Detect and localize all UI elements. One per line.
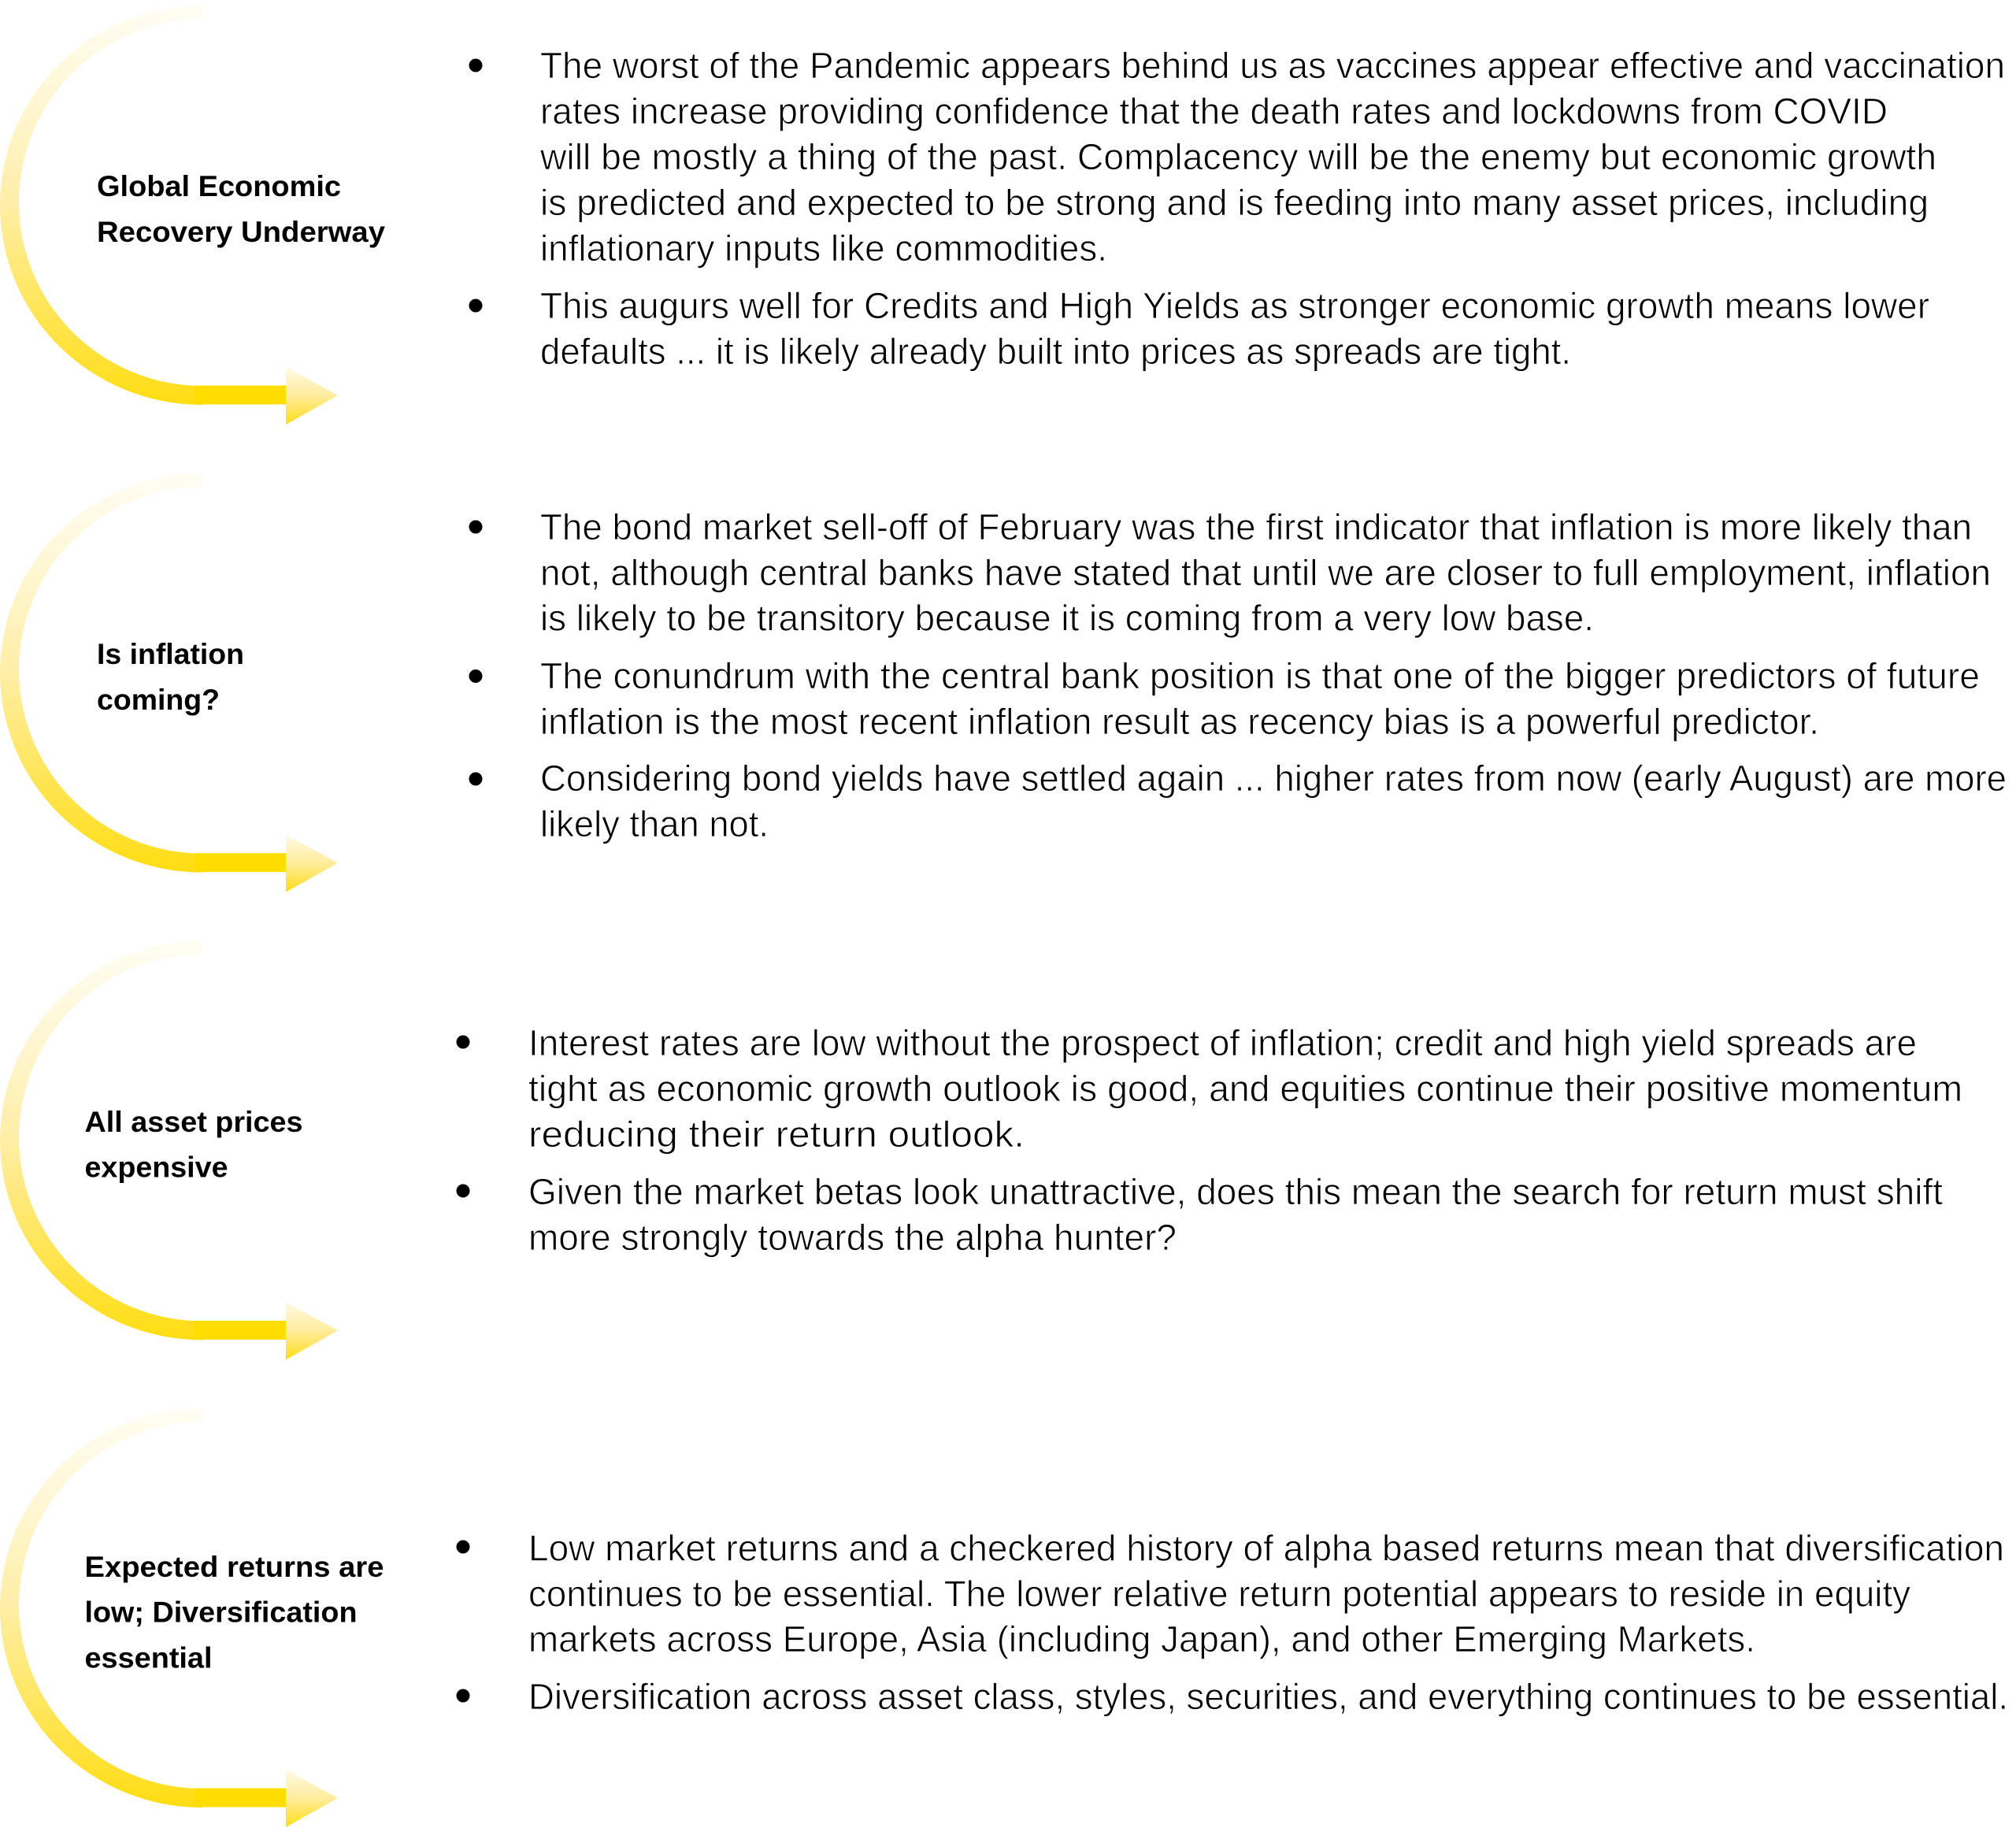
bullet: bond yields settled: Considering bond yields have settled again ... higher rates from now (early August) are more xyxy=(540,758,2007,799)
panel: all asset prices expensive xyxy=(0,940,1962,1359)
bullet: pandemic behind us: will be mostly a thing of the past. Complacency will be the enemy but economic growth xyxy=(539,136,1936,177)
heading: Expected returns are xyxy=(85,1551,384,1583)
icon: curved arrow xyxy=(0,1408,338,1827)
heading xyxy=(97,638,244,716)
icon: curved arrow xyxy=(0,6,338,425)
heading: expensive xyxy=(85,1151,228,1183)
bullet: low market returns: markets across Europe, Asia (including Japan), and other Emerging Markets. xyxy=(528,1619,1755,1659)
heading: Is inflation xyxy=(97,638,244,670)
panel: is inflation coming xyxy=(0,473,2007,892)
heading: Global Economic xyxy=(97,170,341,202)
bullet: bond market sell-off: is likely to be transitory because it is coming from a very low base. xyxy=(540,597,1594,638)
bullet: interest rates low: tight as economic growth outlook is good, and equities continue their positive momentum xyxy=(528,1068,1962,1109)
bullet: bond yields settled: likely than not. xyxy=(540,803,769,844)
bullet: market betas unattractive: more strongly towards the alpha hunter? xyxy=(528,1217,1177,1258)
bullet: low market returns: continues to be essential. The lower relative return potential appears to reside in equity xyxy=(528,1574,1911,1615)
bullet: pandemic behind us: inflationary inputs like commodities. xyxy=(540,228,1107,269)
heading xyxy=(97,170,385,248)
icon: curved arrow xyxy=(0,940,338,1359)
heading: coming? xyxy=(97,684,220,716)
bullet: central bank conundrum: The conundrum with the central bank position is that one of the bigger predictors of future xyxy=(540,655,1980,696)
bullet: diversification essential: Diversification across asset class, styles, securities, and everything continues to be essential. xyxy=(528,1676,2008,1717)
heading xyxy=(85,1106,302,1183)
bullet: bond market sell-off xyxy=(469,506,1991,638)
bullet: bond market sell-off: The bond market sell-off of February was the first indicator that inflation is more likely than xyxy=(540,506,1972,547)
bullet: credits and high yields: defaults ... it is likely already built into prices as spreads are tight. xyxy=(540,331,1571,372)
bullet: low market returns: Low market returns and a checkered history of alpha based returns mean that diversification xyxy=(528,1528,2004,1569)
bullet: low market returns xyxy=(457,1528,2004,1659)
bullet: market betas unattractive: Given the market betas look unattractive, does this mean the search for return must shift xyxy=(528,1171,1943,1212)
heading: Recovery Underway xyxy=(97,216,385,248)
bullet: interest rates low xyxy=(457,1022,1962,1155)
heading: low; Diversification xyxy=(85,1596,358,1629)
bullet: bond yields settled xyxy=(469,758,2007,844)
bullet: market betas unattractive xyxy=(457,1171,1943,1258)
bullet: pandemic behind us: is predicted and expected to be strong and is feeding into many asset prices, including xyxy=(540,182,1929,223)
bullet: pandemic behind us xyxy=(469,45,2005,269)
bullet: bond market sell-off: not, although central banks have stated that until we are closer to full employment, inflation xyxy=(540,552,1991,593)
bullet: pandemic behind us: rates increase providing confidence that the death rates and lockdowns from COVID xyxy=(540,91,1888,132)
panel: global economic recovery xyxy=(0,6,2005,425)
bullet: pandemic behind us: The worst of the Pandemic appears behind us as vaccines appear effective and vaccination xyxy=(540,45,2005,86)
heading xyxy=(85,1551,384,1674)
bullet: central bank conundrum xyxy=(469,655,1980,742)
heading: essential xyxy=(85,1641,213,1674)
bullet: interest rates low: Interest rates are low without the prospect of inflation; credit and high yield spreads are xyxy=(528,1022,1917,1063)
bullet: credits and high yields: This augurs well for Credits and High Yields as stronger economic growth means lower xyxy=(540,285,1929,326)
heading: All asset prices xyxy=(85,1106,302,1138)
bullet: credits and high yields xyxy=(469,285,1929,372)
bullet: central bank conundrum: inflation is the most recent inflation result as recency bias is a powerful predictor. xyxy=(540,701,1819,742)
bullet: interest rates low: reducing their return outlook. xyxy=(528,1114,1025,1155)
icon: curved arrow xyxy=(0,473,338,892)
panel: expected returns low xyxy=(0,1408,2008,1827)
